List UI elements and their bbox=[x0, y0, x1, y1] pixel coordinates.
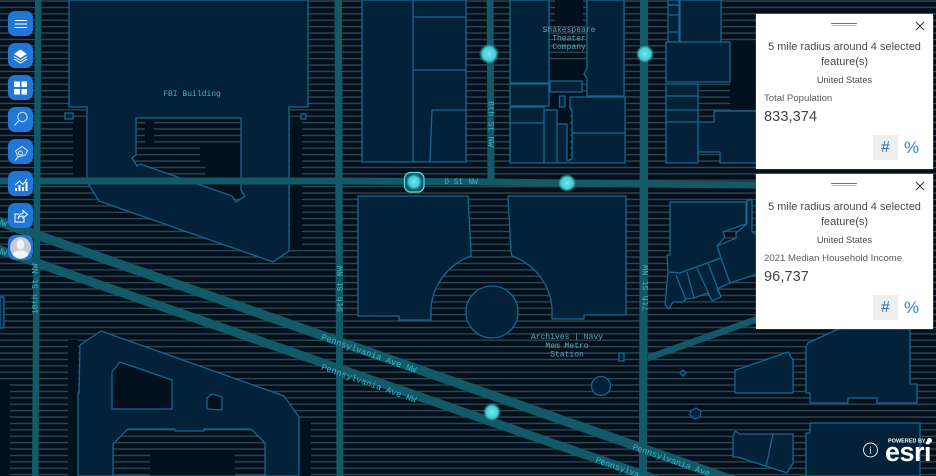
label: 10th St NW: 10th St NW bbox=[30, 263, 40, 315]
panel title: 5 mile radius around 4 selected bbox=[768, 201, 921, 213]
building: archives west bbox=[358, 196, 471, 320]
button: apps grid bbox=[8, 75, 33, 100]
esri logo: POWERED BY bbox=[888, 438, 926, 444]
toggle: number bbox=[873, 295, 898, 320]
label: FBI Building: FBI Building bbox=[163, 90, 221, 99]
building: east columns bbox=[666, 0, 760, 163]
building: Shakespeare block bbox=[510, 0, 549, 83]
building: south large bbox=[78, 331, 299, 476]
building: Shakespeare east bbox=[584, 0, 624, 96]
label: Shakespeare Theater Company: Shakespeare bbox=[543, 26, 595, 35]
toggle: percent: % bbox=[904, 138, 919, 157]
label: 7th St NW: 7th St NW bbox=[641, 264, 651, 311]
info icon: i bbox=[869, 446, 872, 456]
building: small kiosk bbox=[619, 353, 624, 361]
building: south of east bbox=[569, 97, 625, 163]
panel title: feature(s) bbox=[821, 56, 868, 68]
building: plaza circle bbox=[466, 286, 518, 338]
info icon bbox=[864, 443, 878, 457]
button: avatar bbox=[8, 235, 33, 260]
label: Archives Navy Memorial Metro Station: Mem Metro bbox=[545, 342, 589, 351]
button: chart bbox=[8, 171, 33, 196]
label: 9th St NW: 9th St NW bbox=[336, 265, 346, 312]
label: Pennsylvania Ave NW upper: Pennsylvania Ave NW bbox=[320, 333, 418, 376]
toolbar bbox=[8, 11, 33, 260]
panel title bbox=[768, 41, 921, 68]
button: share bbox=[8, 203, 33, 228]
metric label: Total Population bbox=[764, 93, 832, 104]
building: hexagon bbox=[690, 408, 701, 419]
label: Archives Navy Memorial Metro Station: Archives | Navy bbox=[531, 333, 603, 342]
building: south east complex bbox=[667, 202, 746, 273]
close icon bbox=[916, 22, 924, 30]
metric value: 96,737 bbox=[764, 269, 809, 285]
metric label: 2021 Median Household Income bbox=[764, 253, 902, 264]
toggle: number bbox=[873, 135, 898, 160]
button: search bbox=[8, 107, 33, 132]
marker bbox=[558, 174, 576, 192]
panel title: feature(s) bbox=[821, 216, 868, 228]
road labels bbox=[0, 101, 711, 476]
label: Shakespeare Theater Company: Theater bbox=[552, 34, 586, 44]
marker bbox=[483, 403, 501, 421]
country: United States bbox=[817, 235, 872, 245]
map labels bbox=[163, 26, 603, 360]
building: fan block bbox=[665, 200, 760, 309]
building: southeast small bbox=[735, 352, 793, 393]
selected point markers bbox=[404, 44, 654, 421]
building: southeast large bbox=[806, 325, 917, 403]
building: FBI bbox=[69, 0, 308, 262]
building: Shakespeare annex bbox=[510, 81, 582, 163]
close icon bbox=[916, 182, 924, 190]
marker bbox=[479, 44, 499, 64]
label: Shakespeare Theater Company: Company bbox=[552, 43, 586, 52]
toggle: number: # bbox=[881, 299, 890, 316]
drag handle bbox=[831, 23, 857, 26]
button: location pin bbox=[8, 139, 33, 164]
label: D St NW: D St NW bbox=[444, 178, 478, 187]
button: menu bbox=[8, 11, 33, 36]
label: Archives Navy Memorial Metro Station: Station bbox=[550, 350, 584, 360]
panel: median household income bbox=[756, 174, 933, 329]
selected marker bbox=[404, 172, 424, 192]
panel title bbox=[768, 201, 921, 228]
metric value: 833,374 bbox=[764, 109, 817, 125]
button: layers bbox=[8, 43, 33, 68]
drag handle bbox=[831, 183, 857, 186]
building: small circle bbox=[592, 376, 610, 396]
panel: total population bbox=[756, 14, 933, 169]
courtyard hole bbox=[112, 362, 222, 410]
label: 8th St NW: 8th St NW bbox=[486, 101, 496, 148]
building: southeast lower bbox=[806, 423, 920, 476]
toggle: number: # bbox=[881, 139, 890, 156]
building: north block left bbox=[362, 0, 466, 162]
building: southeast fan bbox=[733, 431, 793, 473]
panel title: 5 mile radius around 4 selected bbox=[768, 41, 921, 53]
marker bbox=[636, 45, 654, 63]
esri logo: esri bbox=[885, 437, 931, 467]
label: Pennsylvania Ave NW lower: Pennsylvania Ave NW bbox=[320, 363, 418, 406]
building: archives east bbox=[508, 196, 626, 319]
building: small squares bbox=[0, 113, 686, 376]
country: United States bbox=[817, 75, 872, 85]
toggle: percent: % bbox=[904, 298, 919, 317]
